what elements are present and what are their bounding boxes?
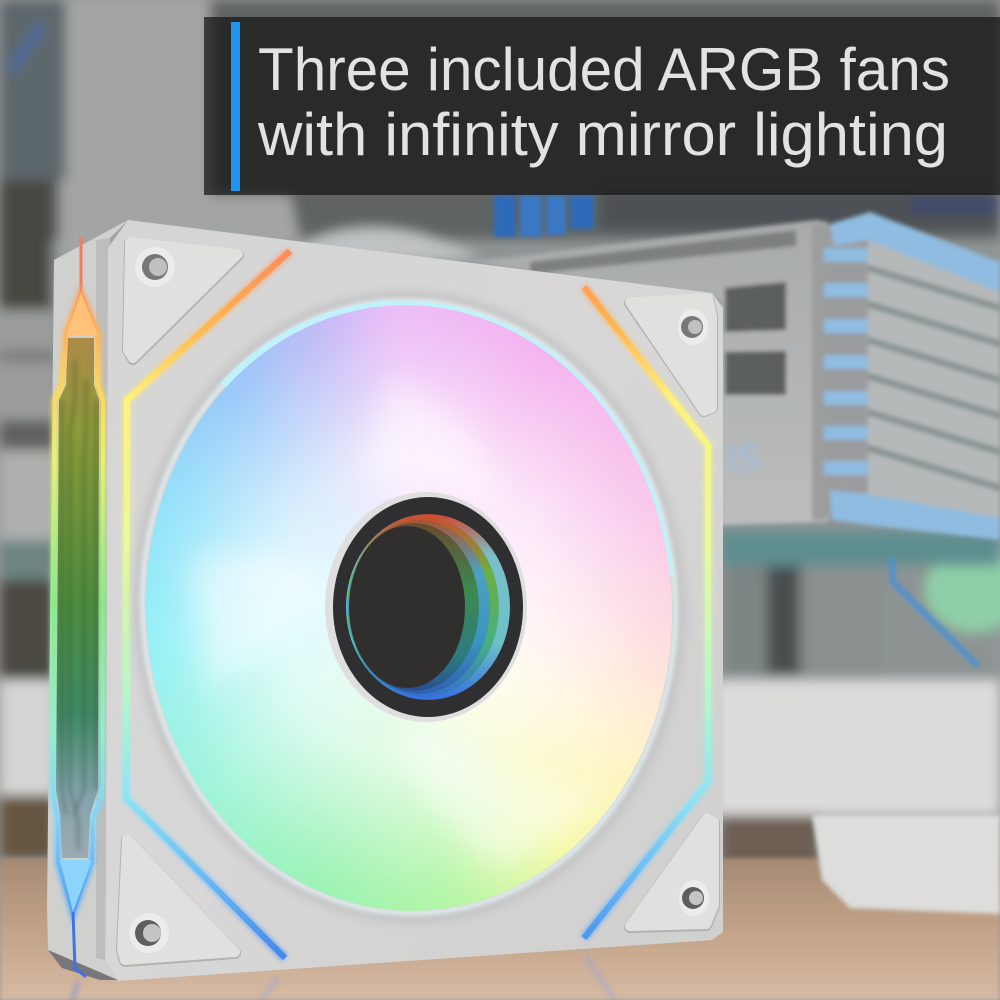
title text: with infinity mirror lighting bbox=[257, 101, 948, 168]
left shelves bbox=[0, 310, 55, 420]
fan front face bbox=[106, 220, 723, 981]
title text bbox=[257, 36, 950, 168]
corner screw holes bbox=[129, 247, 709, 953]
accent bar bbox=[231, 22, 240, 191]
title banner bbox=[204, 17, 1000, 195]
corner pads bbox=[122, 242, 714, 961]
rainbow fan blades bbox=[146, 305, 672, 911]
LED strips bbox=[126, 251, 708, 958]
fan left side panel bbox=[47, 220, 128, 980]
title text: Three included ARGB fans bbox=[258, 36, 950, 103]
wood desk bbox=[0, 858, 1000, 1000]
mirror ring glow bbox=[127, 287, 691, 927]
upper wall bbox=[0, 0, 1000, 240]
radiator fins bbox=[866, 230, 1000, 535]
S lettering on case: IS bbox=[726, 437, 760, 478]
blurred PC case bbox=[470, 212, 1000, 666]
disk ring recess bbox=[119, 279, 699, 935]
blue cables bbox=[494, 195, 594, 237]
white base bbox=[715, 680, 1000, 815]
right lower dark zone bbox=[720, 540, 1000, 680]
